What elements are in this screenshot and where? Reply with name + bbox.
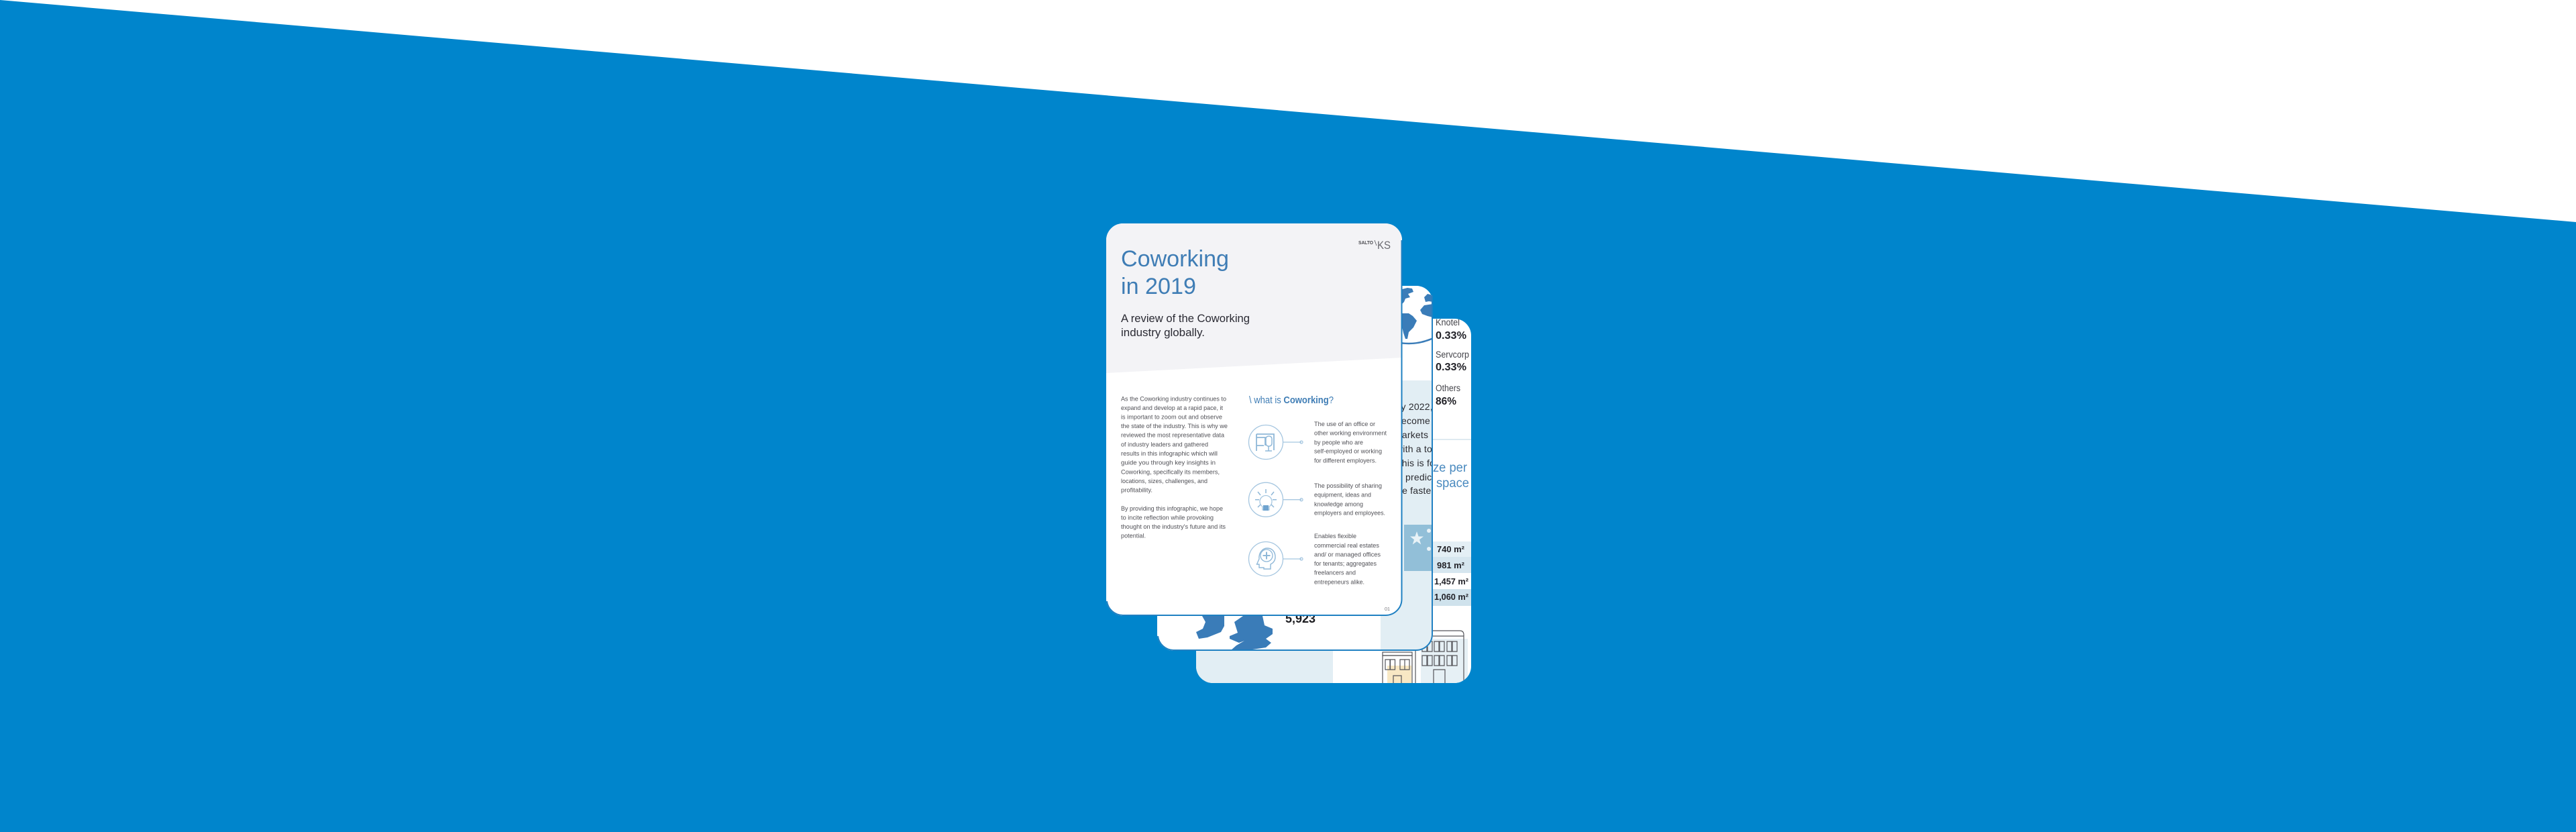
market share list: 0.33% (1436, 362, 1466, 373)
heading: size per space: space (1436, 476, 1469, 490)
map: Ireland and Great Britain (1196, 616, 1273, 650)
intro text: Coworking, specifically its members, (1121, 468, 1220, 476)
text: definition 2: employers and employees. (1314, 510, 1385, 517)
callout: star box (1404, 525, 1433, 571)
text: definition 3 (1314, 533, 1381, 586)
page number: 01 (1385, 606, 1390, 612)
icon: desk (1249, 425, 1303, 459)
illustration: buildings (1383, 631, 1468, 683)
text: definition 3: and/ or managed offices (1314, 552, 1381, 559)
intro text: potential. (1121, 533, 1146, 540)
market share list (1436, 317, 1469, 407)
text: definition 1: self-employed or working (1314, 448, 1382, 456)
size table: 740 m² (1437, 545, 1464, 554)
logo (1358, 240, 1390, 249)
intro text: is important to zoom out and observe (1121, 414, 1222, 421)
intro text: By providing this infographic, we hope (1121, 505, 1223, 513)
border: middle page edge (1158, 295, 1432, 650)
border: front page edge (1107, 240, 1402, 615)
subtitle: industry globally. (1121, 327, 1205, 339)
panel: middle page (1157, 286, 1433, 651)
text: definition 1: The use of an office or (1314, 421, 1375, 428)
panel: front page (1106, 223, 1402, 616)
heading: size per space (1433, 464, 1469, 490)
icon: head with plus (1249, 542, 1303, 576)
heading: size per space: ze per (1433, 461, 1468, 475)
text: definition 2: equipment, ideas and (1314, 492, 1371, 499)
text: definition 1 (1314, 421, 1387, 464)
forecast paragraph: markets (1394, 429, 1428, 440)
size table: 1,457 m² (1434, 577, 1468, 586)
forecast paragraph: with a total (1395, 444, 1442, 454)
forecast paragraph (1402, 404, 1432, 494)
title: Coworking (1121, 246, 1229, 272)
intro text: to incite reflection while provoking (1121, 515, 1214, 522)
text: definition 1: other working environment (1314, 430, 1387, 437)
market share list: Knotel (1436, 317, 1460, 327)
forecast paragraph: By 2022, (1395, 401, 1433, 412)
logo: KS (1377, 239, 1391, 252)
stat: 5,923: 5,923 (1285, 611, 1316, 625)
header band (1106, 223, 1402, 373)
icon: globe (1402, 286, 1432, 345)
intro text: the state of the industry. This is why we (1121, 423, 1228, 430)
intro text (1121, 395, 1228, 540)
panel: back page (1196, 317, 1471, 683)
logo: SALTO (1358, 240, 1373, 246)
white diagonal band (0, 0, 2576, 222)
icon: light bulb (1249, 482, 1303, 517)
market share list: Others (1436, 383, 1460, 393)
intro text: locations, sizes, challenges, and (1121, 478, 1208, 485)
forecast paragraph: become (1396, 415, 1430, 426)
subtitle (1121, 313, 1250, 339)
intro text: thought on the industry's future and its (1121, 523, 1226, 531)
text: definition 1: by people who are (1314, 439, 1363, 446)
subtitle: A review of the Coworking (1121, 313, 1250, 325)
text: definition 2 (1314, 482, 1385, 517)
intro text: reviewed the most representative data (1121, 432, 1225, 439)
text: definition 1: for different employers. (1314, 457, 1377, 464)
intro text: As the Coworking industry continues to (1121, 395, 1226, 403)
market share list: 86% (1436, 396, 1456, 407)
market share list: 0.33% (1436, 330, 1466, 342)
intro text: guide you through key insights in (1121, 460, 1216, 467)
text: definition 2: knowledge among (1314, 501, 1363, 508)
text: definition 3: entrepeneurs alike. (1314, 578, 1364, 586)
intro text: expand and develop at a rapid pace, it (1121, 405, 1223, 412)
title: in 2019 (1121, 274, 1196, 299)
intro text: of industry leaders and gathered (1121, 441, 1208, 448)
size table (1433, 541, 1471, 606)
title (1122, 250, 1228, 294)
text: definition 3: freelancers and (1314, 570, 1356, 577)
size table: 981 m² (1437, 561, 1464, 570)
intro text: results in this infographic which will (1121, 450, 1218, 458)
text: definition 2: The possibility of sharing (1314, 482, 1382, 490)
intro text: profitability. (1121, 487, 1152, 495)
text: definition 3: Enables flexible (1314, 533, 1356, 540)
text: definition 3: for tenants; aggregates (1314, 560, 1377, 568)
market share list: Servcorp (1436, 350, 1469, 360)
size table: 1,060 m² (1434, 592, 1468, 602)
forecast paragraph: the fastest (1394, 485, 1439, 496)
heading: what is Coworking: \ what is Coworking? (1249, 395, 1334, 406)
text: definition 3: commercial real estates (1314, 542, 1379, 550)
forecast paragraph: predicted (1405, 472, 1445, 482)
forecast paragraph: This is for (1396, 458, 1438, 468)
